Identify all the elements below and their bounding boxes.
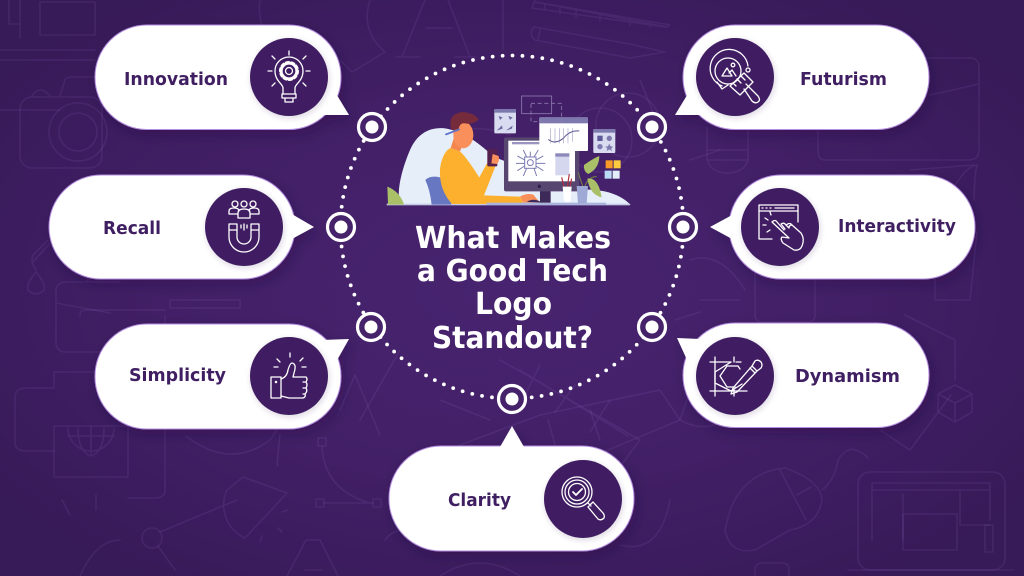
panel: interactivity: Interactivity	[838, 216, 956, 237]
panel: innovation: Innovation	[124, 69, 228, 90]
chart panel	[539, 117, 588, 151]
panel: dynamism: Dynamism	[795, 366, 900, 387]
background blob	[399, 128, 631, 205]
left leaf	[387, 187, 404, 205]
colour swatches	[605, 160, 621, 179]
node: recall	[328, 214, 354, 240]
plant and pen cup	[562, 156, 602, 203]
monitor	[504, 137, 579, 203]
node: dynamism	[638, 314, 666, 340]
node: futurism	[638, 114, 666, 140]
panel: simplicity	[95, 324, 349, 429]
node: clarity	[498, 386, 526, 412]
panel: futurism: Futurism	[800, 69, 887, 90]
central illustration: designer at computer	[387, 96, 631, 205]
panel: clarity	[389, 426, 634, 551]
chair	[425, 177, 451, 205]
icon: light bulb with gear	[268, 51, 310, 102]
title: What Makes	[415, 221, 611, 256]
tool cards	[494, 109, 615, 153]
desk	[487, 203, 606, 205]
icon: hexagon and pencil	[710, 357, 762, 396]
panel: recall	[49, 175, 314, 279]
title	[415, 221, 611, 356]
node: simplicity	[358, 314, 384, 340]
person	[440, 112, 542, 204]
chip icon	[516, 150, 545, 176]
title: a Good Tech	[417, 254, 608, 289]
node: interactivity	[670, 214, 696, 240]
title: Logo	[475, 287, 552, 322]
dotted circle	[340, 56, 684, 398]
dashed frames	[522, 96, 562, 122]
base line	[387, 204, 630, 205]
title: Standout?	[432, 321, 593, 356]
icon: magnifier with check	[562, 477, 604, 520]
icon: brush and rotating image	[710, 49, 760, 103]
panel: innovation	[95, 25, 349, 130]
node: innovation	[358, 114, 386, 140]
panel: clarity: Clarity	[448, 490, 511, 511]
panel: recall: Recall	[103, 218, 161, 239]
icon: magnet attracting people	[229, 201, 259, 252]
panel: simplicity: Simplicity	[129, 365, 226, 386]
panel: futurism	[675, 25, 929, 130]
panel: dynamism	[677, 323, 929, 428]
panel: interactivity	[710, 175, 975, 279]
icon: browser window with pointing hand	[759, 205, 803, 250]
icon: thumbs up	[271, 353, 307, 398]
